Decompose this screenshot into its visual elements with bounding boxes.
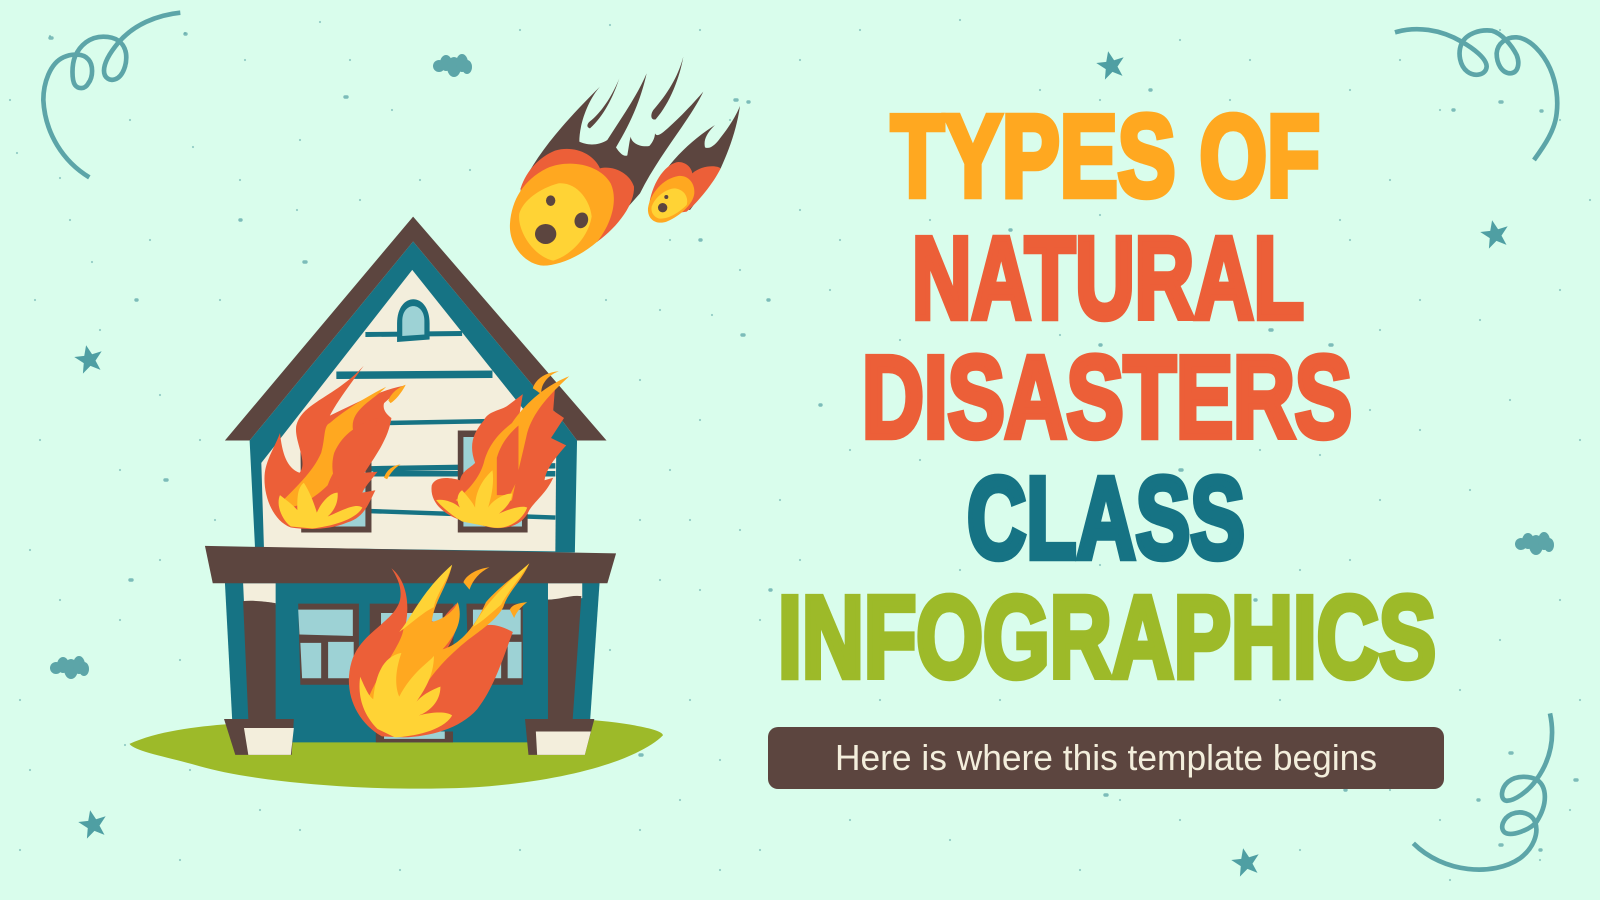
meteor: small <box>648 106 740 223</box>
house: floor slab <box>205 546 616 583</box>
title: line 3: DISASTERS <box>862 332 1352 462</box>
meteor: large <box>510 57 703 266</box>
flame: upper left <box>264 366 406 529</box>
star: left <box>72 342 105 375</box>
star: top centre <box>1094 48 1127 81</box>
house: roof <box>225 217 607 440</box>
flame: upper right <box>431 371 569 528</box>
subtitle bar: Here is where this template begins <box>835 737 1377 778</box>
house: upper storey <box>250 241 577 552</box>
star: bottom centre <box>1229 845 1262 878</box>
cloud: top <box>433 54 472 77</box>
illustration: burning house <box>129 217 663 789</box>
star: bottom left <box>76 807 109 840</box>
cloud: right <box>1515 532 1554 555</box>
title: line 1: TYPES OF <box>891 91 1320 221</box>
flame: lower centre <box>349 563 529 737</box>
title: line 4: CLASS <box>967 453 1245 583</box>
curl: top left <box>43 13 180 177</box>
subtitle bar <box>768 727 1444 789</box>
grass <box>129 719 663 789</box>
star: right <box>1478 217 1511 250</box>
cloud: left <box>50 656 89 679</box>
curl: bottom right <box>1413 713 1552 870</box>
illustration: meteors <box>510 57 740 266</box>
house: lower storey <box>224 582 600 755</box>
title: line 2: NATURAL <box>912 213 1304 343</box>
curl: top right <box>1395 29 1557 160</box>
